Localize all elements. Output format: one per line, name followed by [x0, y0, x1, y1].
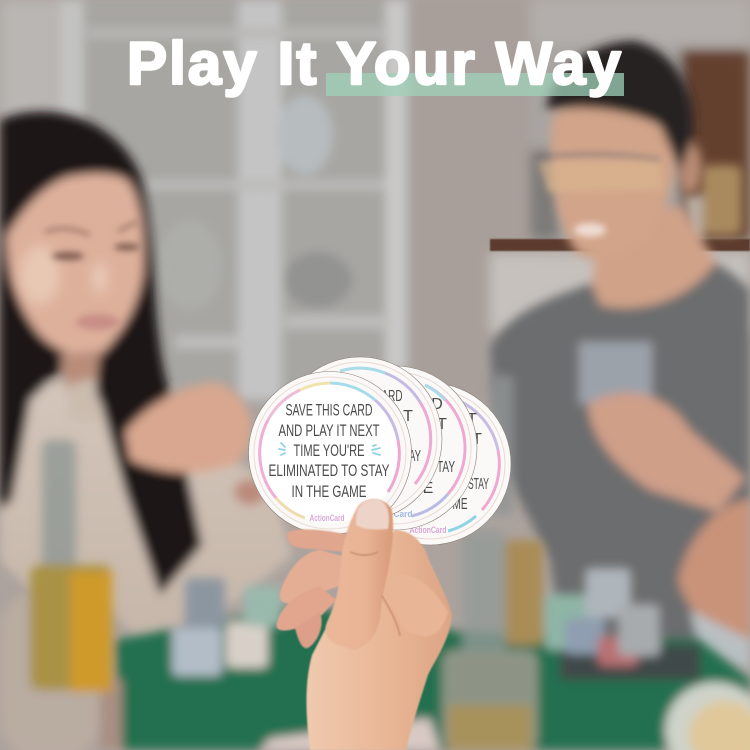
card rule text: AND PLAY IT NEXT	[278, 421, 380, 440]
hand holding the cards	[277, 499, 452, 750]
card 4 (back): STAY	[468, 476, 489, 493]
card 2: AY	[409, 448, 421, 465]
card 3	[313, 366, 477, 530]
icon: sparkle right	[372, 445, 380, 455]
man	[490, 41, 750, 680]
title highlight bar	[326, 73, 624, 96]
card 3: Card	[394, 509, 412, 519]
title: Play It Your Way	[127, 30, 622, 97]
palm and back of hand	[306, 530, 452, 750]
card 4 (back): ActionCard	[410, 525, 446, 535]
card 4 (back): T	[472, 431, 482, 448]
table and props	[0, 375, 750, 750]
card 4 (back)	[349, 383, 511, 545]
card 3: D	[431, 396, 443, 413]
card rule text: ELIMINATED TO STAY	[268, 461, 390, 480]
card rule text: IN THE GAME	[292, 482, 366, 501]
icon: thumbnail	[356, 499, 389, 530]
card logo: ActionCard	[310, 513, 344, 523]
card rule text	[268, 400, 390, 501]
card 2: T	[403, 408, 413, 425]
card 3: T	[437, 416, 447, 433]
card 3: E	[423, 480, 433, 497]
icon: sparkle left	[279, 443, 285, 455]
woman	[0, 112, 292, 642]
thumb	[325, 499, 393, 650]
card 2	[278, 357, 442, 521]
card 3: TAY	[437, 459, 455, 476]
card 4 (back): ME	[452, 496, 468, 513]
card 1 (front) with rule text	[248, 372, 412, 534]
card 4 (back): T	[467, 411, 477, 428]
fingers	[287, 529, 345, 552]
card 2: ARD	[382, 388, 402, 405]
card rule text: SAVE THIS CARD	[286, 400, 372, 420]
card rule text: TIME YOU'RE	[294, 441, 364, 460]
